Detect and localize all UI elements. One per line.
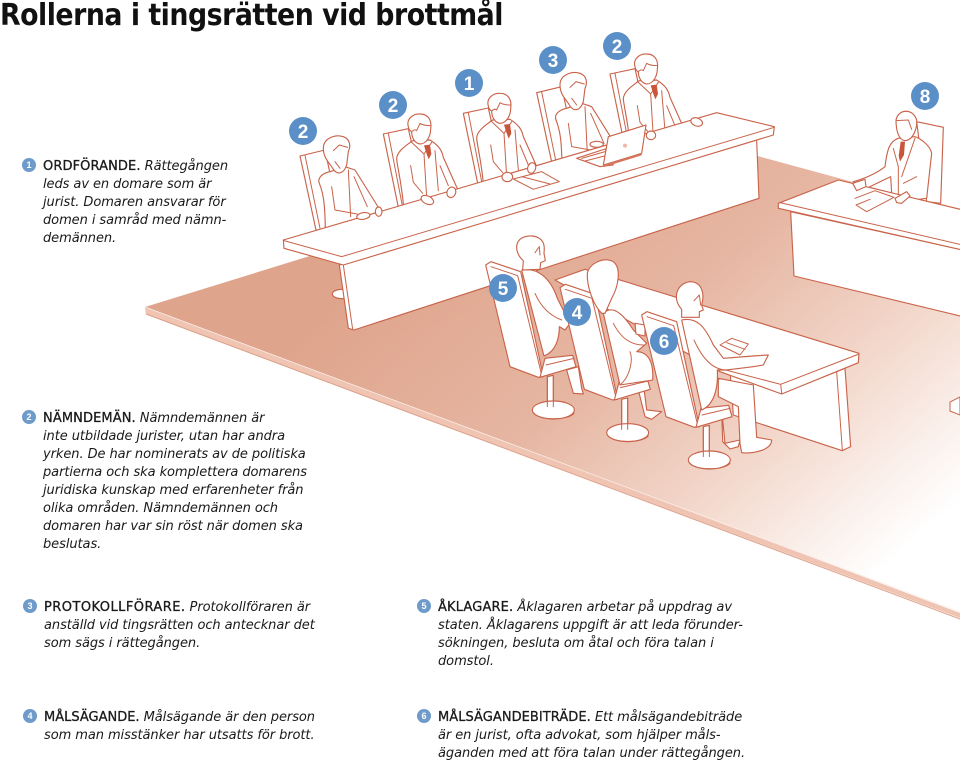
badge 1 [455, 69, 483, 97]
badge 6 [650, 327, 678, 355]
badge 5: 5 [498, 279, 509, 300]
text: ordförande: ORDFÖRANDE. Rättegången [43, 159, 228, 174]
text: nämndemän [42, 410, 307, 552]
person: chair judge [463, 93, 540, 190]
seated person 5 with chair [486, 236, 583, 419]
papers on bench [513, 172, 559, 189]
text: åklagare: staten. Åklagarens uppgift är att leda förunder- [438, 618, 743, 633]
bullet 6 [417, 709, 431, 723]
chair foot under bench [332, 289, 351, 299]
papers [855, 191, 894, 212]
table body [730, 368, 851, 451]
table top [555, 269, 859, 394]
desk top [778, 180, 960, 252]
bullet 3 [23, 599, 37, 613]
table edge line [723, 354, 859, 393]
badge 6: 6 [659, 332, 669, 353]
badge 2 [379, 91, 407, 119]
bullet 4 [23, 709, 37, 723]
bullet 5 [417, 599, 431, 613]
text: åklagare: ÅKLAGARE. Åklagaren arbetar på uppdrag av [438, 600, 732, 615]
text: protokollförare: som sägs i rättegången. [44, 636, 200, 651]
bullet 1 [22, 158, 36, 172]
bullet 1: 1 [26, 160, 32, 170]
text: nämndemän: olika områden. Nämndemännen och [43, 501, 278, 516]
person jacket detail [893, 138, 917, 202]
text: nämndemän: partierna och ska komplettera domarens [43, 465, 307, 480]
bullet 3: 3 [27, 601, 32, 611]
seated person 4 with chair [560, 260, 662, 442]
badge 3 [539, 46, 567, 74]
floor [145, 138, 960, 619]
person: clerk [537, 73, 620, 167]
person: lay judge right [610, 54, 687, 151]
papers on table [720, 338, 748, 355]
text: nämndemän: inte utbildade jurister, utan har andra [43, 429, 285, 444]
person torso [853, 137, 932, 202]
text: nämndemän: domaren har var sin röst när domen ska [43, 519, 303, 534]
text: åklagare: domstol. [438, 654, 494, 669]
tie [899, 142, 905, 162]
badge 1: 1 [464, 74, 475, 95]
text: ordförande: leds av en domare som är [43, 177, 211, 192]
hands [853, 179, 910, 203]
text: målsägandebiträde: är en jurist, ofta advokat, som hjälper måls- [438, 728, 720, 743]
badge 2: 2 [298, 122, 308, 143]
bullet 2: 2 [26, 412, 32, 422]
bullet 5: 5 [421, 601, 426, 611]
panel: desk with person 8 [778, 111, 960, 318]
text: målsägande: MÅLSÄGANDE. Målsägande är den person [44, 710, 315, 725]
bullet 2 [22, 410, 36, 424]
text: ordförande: jurist. Domaren ansvarar för [43, 195, 226, 210]
desk body [791, 212, 960, 318]
badge 4: 4 [572, 303, 583, 324]
panel: judges bench group [283, 54, 774, 330]
text: målsägande: som man misstänker har utsatts för brott. [44, 728, 315, 743]
laptop [577, 125, 646, 167]
badge 8 [911, 82, 939, 110]
seated person 6 with chair [642, 282, 772, 469]
bench top front edge [284, 127, 774, 257]
bench inner edge [343, 265, 353, 329]
bench top [283, 113, 774, 265]
person hair [896, 120, 912, 129]
person head [896, 111, 917, 141]
bullet 4: 4 [27, 711, 32, 721]
bullet 6: 6 [421, 711, 426, 721]
person: lay judge left [300, 136, 383, 230]
badge 2 [289, 117, 317, 145]
panel: defence and prosecutor table [486, 236, 859, 469]
text: protokollförare: PROTOKOLLFÖRARE. Protokollföraren är [44, 600, 310, 615]
text: målsägande [44, 708, 315, 743]
table leg edge [837, 372, 842, 450]
bench body [339, 140, 759, 330]
text: åklagare: sökningen, besluta om åtal och föra talan i [438, 636, 714, 651]
text: nämndemän: NÄMNDEMÄN. Nämndemännen är [43, 411, 264, 426]
hands on bench [356, 116, 704, 220]
chair [917, 122, 943, 203]
text: målsägandebiträde: MÅLSÄGANDEBITRÄDE. Ett målsägandebiträde [438, 710, 742, 725]
badge 8: 8 [920, 87, 930, 108]
text: ordförande: domen i samråd med nämn- [43, 213, 226, 228]
badge 3: 3 [548, 51, 558, 72]
desk top edge [780, 203, 960, 247]
text: nämndemän: juridiska kunskap med erfarenheter från [43, 483, 303, 498]
badge 5 [489, 274, 517, 302]
text: nämndemän: yrken. De har nominerats av de politiska [43, 447, 306, 462]
text: åklagare [438, 598, 743, 669]
text: nämndemän: beslutas. [43, 537, 101, 552]
small table corner at right edge [950, 397, 960, 415]
text: målsägandebiträde [438, 708, 745, 761]
text: protokollförare [44, 598, 316, 651]
person: lay judge second [383, 114, 460, 211]
text: målsägandebiträde: äganden med att föra talan under rättegången. [438, 746, 745, 761]
text: protokollförare: anställd vid tingsrätten och antecknar det [44, 618, 315, 633]
badge 2 [603, 32, 631, 60]
text: ordförande [42, 157, 228, 246]
badge 2: 2 [612, 37, 622, 58]
badge 2: 2 [388, 96, 398, 117]
badge 4 [563, 298, 591, 326]
text: ordförande: demännen. [43, 231, 116, 246]
